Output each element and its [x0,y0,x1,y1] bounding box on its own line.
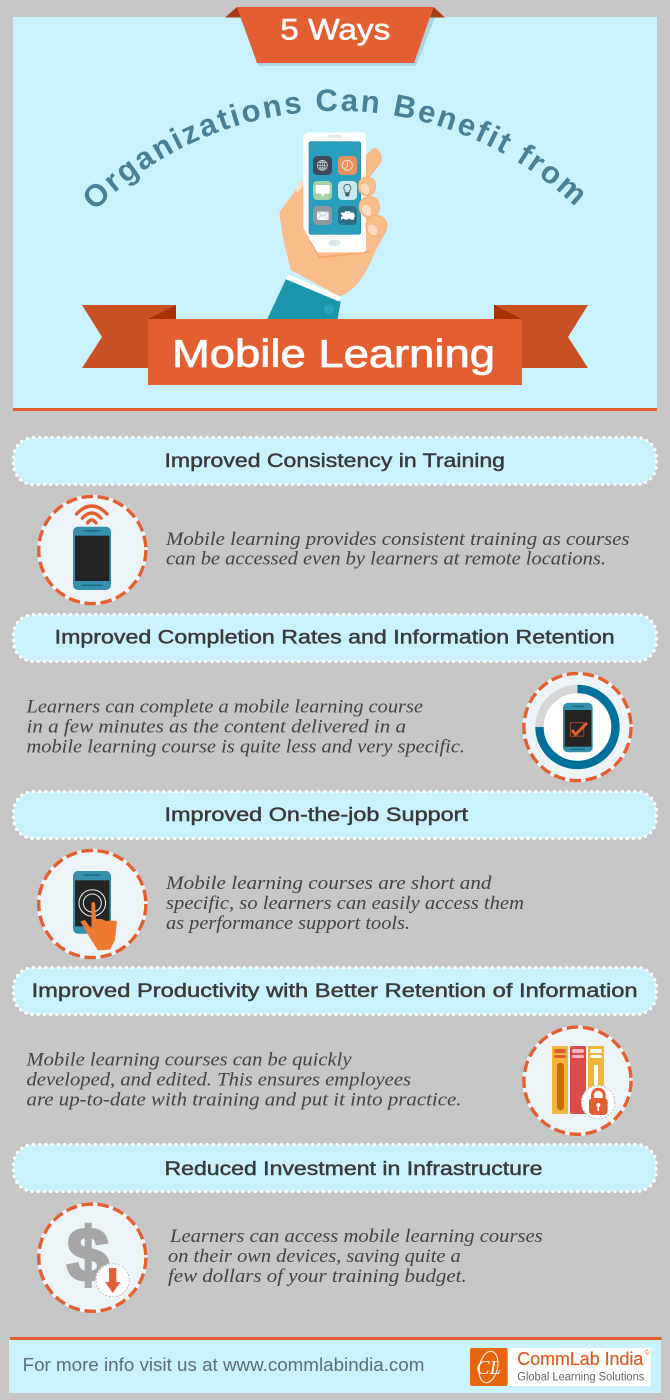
text: completion description: in a few minutes as the content delivered in a [26,718,406,738]
ribbon: 5 Ways [225,7,445,66]
logo: CommLab India [470,1348,651,1386]
text: infrastructure description: few dollars of your training budget. [168,1267,467,1287]
illustration: hand holding phone [267,132,387,319]
text: completion description: mobile learning course is quite less and very specific. [26,738,465,758]
phone [303,132,366,252]
curved heading: Organizations Can Benefit from [84,89,584,206]
ribbon: Mobile Learning [82,305,588,385]
section 2: completion [14,614,656,782]
section 4: productivity [14,968,656,1136]
text: consistency description: Mobile learning provides consistent training as courses [165,530,630,550]
logo: CommLab India: Global Learning Solutions [517,1372,645,1384]
text: completion description: Learners can complete a mobile learning course [25,698,423,718]
heading pill 2: Improved Completion Rates and Information Retention [55,628,615,648]
app icon: globe [313,156,332,175]
ribbon: 5 Ways: 5 Ways [280,14,390,46]
text: on-the-job description: as performance support tools. [166,914,410,934]
heading pill 3 [14,792,656,838]
footer link text: For more info visit us at www.commlabindia.com [23,1355,424,1375]
heading pill 5 [14,1144,656,1192]
app icon: clock [338,156,357,175]
heading pill 2 [14,614,656,662]
text: infrastructure description: on their own devices, saving quite a [168,1247,461,1267]
section 5: infrastructure [14,1144,656,1313]
text: on-the-job description: Mobile learning courses are short and [165,874,492,894]
app icon: envelope [313,206,332,225]
text: consistency description [165,530,630,570]
section 3: on-the-job [14,792,656,959]
logo: CommLab India: CommLab India [517,1349,644,1369]
app icon: puzzle piece [338,206,357,225]
text: on-the-job description [165,874,524,934]
text: consistency description: can be accessed even by learners at remote locations. [166,550,606,570]
logo: CommLab India: CL [476,1357,501,1379]
app icon: speech bubble [313,181,332,200]
heading pill 3: Improved On-the-job Support [164,805,469,826]
text: infrastructure description [168,1227,543,1287]
heading pill 5: Reduced Investment in Infrastructure [164,1159,542,1180]
text: productivity description [25,1051,461,1110]
panel: hero header [13,7,657,411]
icon: phone with wifi [37,495,148,605]
text: productivity description: Mobile learning courses can be quickly [25,1051,352,1071]
footer panel [9,1337,662,1393]
app icon: light bulb [338,181,357,200]
logo: CommLab India: © [644,1348,650,1356]
icon: phone with touching hand [37,849,148,959]
text: on-the-job description: specific, so learners can easily access them [166,894,524,914]
text: productivity description: developed, and edited. This ensures employees [26,1070,411,1090]
text: completion description [25,698,465,758]
heading pill 1 [14,438,656,484]
text: productivity description: are up-to-date with training and put it into practice. [26,1090,461,1110]
fingers [358,177,387,237]
icon: books with lock [522,1025,633,1136]
icon: dollar with down arrow: $ [67,1213,109,1298]
section 1: consistency [14,438,656,605]
icon: dollar with down arrow [37,1202,148,1313]
heading pill 1: Improved Consistency in Training [164,451,505,472]
heading pill 4: Improved Productivity with Better Retention of Information [32,981,638,1002]
icon: progress ring with phone [522,672,633,782]
heading pill 4 [14,968,656,1014]
text: infrastructure description: Learners can access mobile learning courses [169,1227,543,1247]
ribbon: Mobile Learning: Mobile Learning [172,333,495,376]
jacket sleeve [267,275,341,319]
